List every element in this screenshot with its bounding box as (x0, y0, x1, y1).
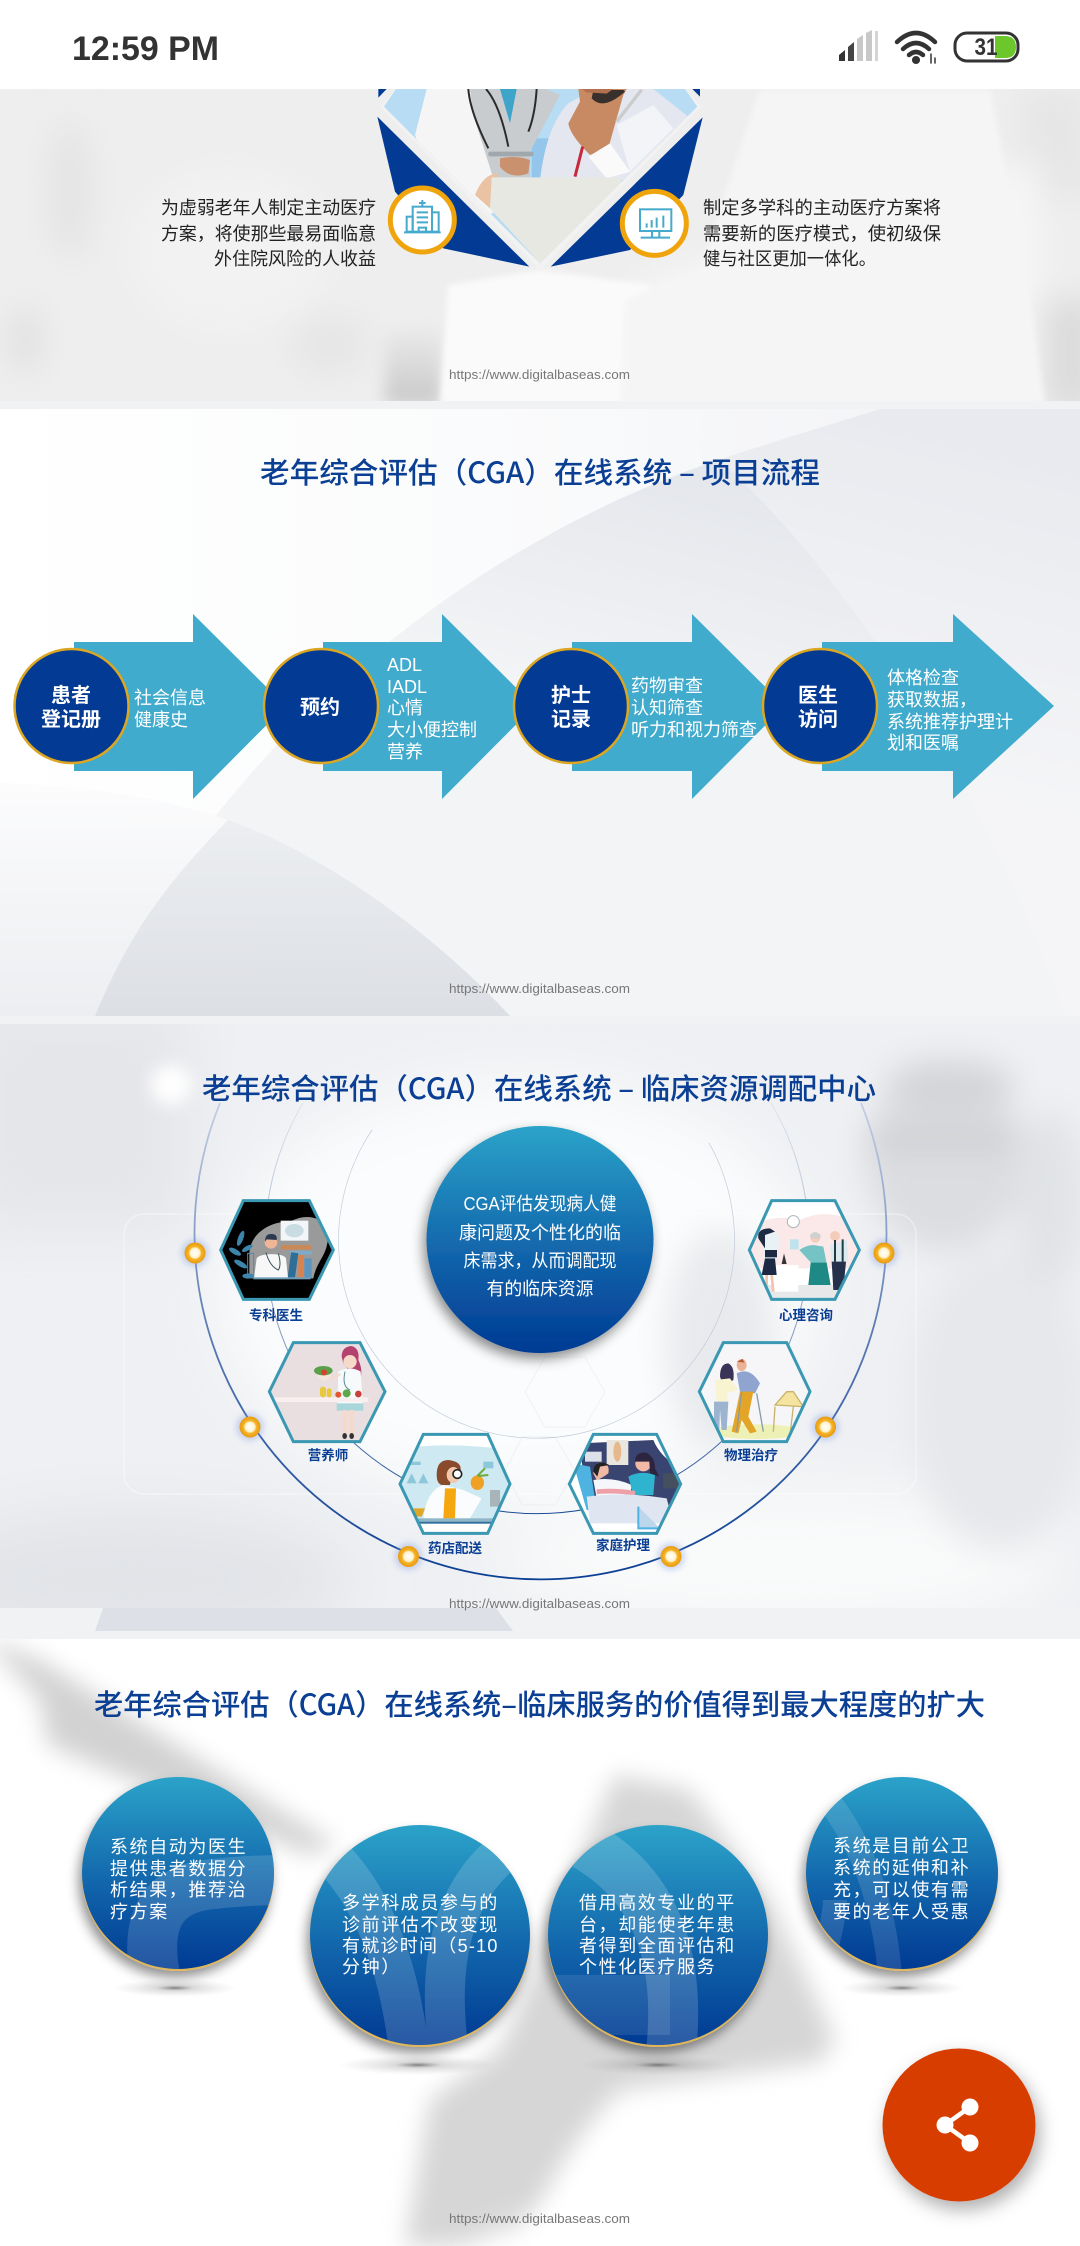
hexagon labels: 心理咨询 (779, 1307, 833, 1323)
bubble 4: 要的老年人受惠 (833, 1902, 970, 1922)
central circle: 床需求，从而调配现 (464, 1251, 616, 1271)
photo: doctors (380, 85, 703, 272)
status bar (0, 0, 1080, 89)
text: right benefit: 制定多学科的主动医疗方案将 (703, 198, 941, 218)
panel: project process (0, 409, 1080, 1016)
bubble 2: 有就诊时间（5-10 (342, 1936, 499, 1956)
arrow 3: nurse record: 记录 (551, 708, 591, 731)
bubble 1: 提供患者数据分 (110, 1859, 247, 1879)
bubble 4: 充，可以使有需 (833, 1880, 970, 1900)
orbit rings (194, 1103, 886, 1579)
bubble 1: 疗方案 (110, 1902, 169, 1922)
white bands around photo (380, 89, 701, 270)
bubble 3: 台，却能使老年患 (579, 1915, 736, 1935)
arrow 4: doctor visit: 系统推荐护理计 (887, 712, 1013, 732)
arrow 4: doctor visit: 访问 (798, 708, 838, 731)
arrow 4: doctor visit: 划和医嘱 (887, 733, 959, 753)
clock: 12:59 PM (72, 30, 219, 68)
bubble 1: 析结果，推荐治 (110, 1880, 247, 1900)
arrow 4: doctor visit (763, 614, 1054, 799)
panel: clinical resource center (0, 1024, 1080, 1608)
arrow 2: appointment: IADL (387, 677, 427, 697)
icon: share (936, 2098, 978, 2152)
panel: intro section with photo (0, 85, 1080, 410)
arrow 3: nurse record: 护士 (551, 684, 591, 707)
hexagon labels: 物理治疗 (724, 1447, 778, 1463)
arrow 1: patient registration: 登记册 (41, 708, 101, 731)
panel: value of clinical services (0, 1635, 1080, 2246)
central circle (426, 1126, 654, 1353)
arrow 2: appointment (264, 614, 534, 799)
icon: wifi (897, 33, 935, 63)
url: https://www.digitalbaseas.com (449, 1596, 630, 1611)
arrow 4: doctor visit: 体格检查 (887, 668, 959, 688)
arrow 4: doctor visit: 医生 (798, 684, 838, 707)
bubble 3: 借用高效专业的平 (579, 1893, 736, 1913)
bubble 3 (545, 1825, 768, 2060)
icon: monitor chart (622, 191, 686, 255)
right hexagon illustrations (567, 1198, 862, 1535)
blue triangle left (377, 117, 529, 267)
orbit dots (181, 1239, 898, 1570)
url: https://www.digitalbaseas.com (449, 367, 630, 382)
hexagon labels: 家庭护理 (596, 1537, 650, 1553)
arrow 4: doctor visit: 获取数据， (887, 690, 977, 710)
floor shadows (113, 1979, 964, 2075)
text: right benefit: 健与社区更加一体化。 (703, 249, 876, 269)
arrow 1: patient registration: 健康史 (134, 710, 188, 730)
url: https://www.digitalbaseas.com (449, 981, 630, 996)
hex: physical therapy (697, 1340, 813, 1445)
left hexagon illustrations (210, 1190, 513, 1535)
icon: battery: 31 (974, 34, 998, 61)
arrow 2: appointment: 心情 (387, 698, 423, 718)
hexagon labels: 营养师 (308, 1447, 348, 1463)
arrow 2: appointment: 营养 (387, 742, 423, 762)
hexagon labels: 专科医生 (249, 1307, 303, 1323)
bubble 2: 诊前评估不改变现 (342, 1915, 499, 1935)
text: left benefit (161, 198, 376, 269)
arrow 3: nurse record: 药物审查 (631, 676, 703, 696)
hex: dietitian (267, 1340, 387, 1443)
arrow 2: appointment: ADL (387, 655, 422, 675)
bubble 3: 个性化医疗服务 (579, 1957, 716, 1977)
title: 老年综合评估（CGA）在线系统 – 项目流程 (260, 450, 820, 492)
arrow 3: nurse record: 听力和视力筛查 (631, 720, 757, 740)
hexagon labels: 药店配送 (428, 1540, 482, 1556)
bubble 4: 系统的延伸和补 (833, 1858, 970, 1878)
blue triangle right (551, 117, 703, 267)
arrow 1: patient registration: 患者 (51, 684, 91, 707)
hex: pharmacy delivery (397, 1432, 513, 1535)
icon: hospital (390, 188, 454, 252)
title: 老年综合评估（CGA）在线系统–临床服务的价值得到最大程度的扩大 (94, 1682, 985, 1724)
icon: battery (955, 33, 1018, 61)
text: right benefit: 需要新的医疗模式，使初级保 (703, 224, 941, 244)
arrow 3: nurse record (514, 614, 784, 799)
central circle: 康问题及个性化的临 (459, 1223, 621, 1243)
arrow 1: patient registration: 社会信息 (134, 688, 206, 708)
arrow 2: appointment: 大小便控制 (387, 720, 477, 740)
icon: signal bars (839, 30, 878, 61)
bubble 1: 系统自动为医生 (110, 1837, 247, 1857)
hex: psychological counseling (747, 1198, 862, 1302)
bubble 1 (82, 1777, 285, 1975)
text: left benefit: 方案，将使那些最易面临意 (161, 224, 376, 244)
url: https://www.digitalbaseas.com (449, 2211, 630, 2226)
bubble 4: 系统是目前公卫 (833, 1836, 970, 1856)
bubble 2: 多学科成员参与的 (342, 1893, 499, 1913)
text: left benefit: 外住院风险的人收益 (214, 249, 376, 269)
arrow 3: nurse record: 认知筛查 (631, 698, 703, 718)
bubble 4 (806, 1777, 998, 1990)
bubble 3: 者得到全面评估和 (579, 1936, 736, 1956)
arrow 1: patient registration (14, 614, 286, 799)
hex: home care (567, 1432, 683, 1535)
share button (882, 2048, 1036, 2202)
bubble 2 (310, 1825, 530, 2060)
central circle: CGA评估发现病人健 (464, 1194, 616, 1214)
hexagon labels (249, 1307, 833, 1556)
central circle: 有的临床资源 (486, 1279, 594, 1299)
text: right benefit (703, 198, 941, 269)
hex: specialist doctor (219, 1199, 335, 1301)
bubble 2: 分钟） (342, 1957, 401, 1977)
title: 老年综合评估（CGA）在线系统 – 临床资源调配中心 (202, 1066, 876, 1108)
arrow 2: appointment: 预约 (300, 696, 340, 719)
text: left benefit: 为虚弱老年人制定主动医疗 (161, 198, 376, 218)
photo and blue triangles (377, 85, 703, 272)
